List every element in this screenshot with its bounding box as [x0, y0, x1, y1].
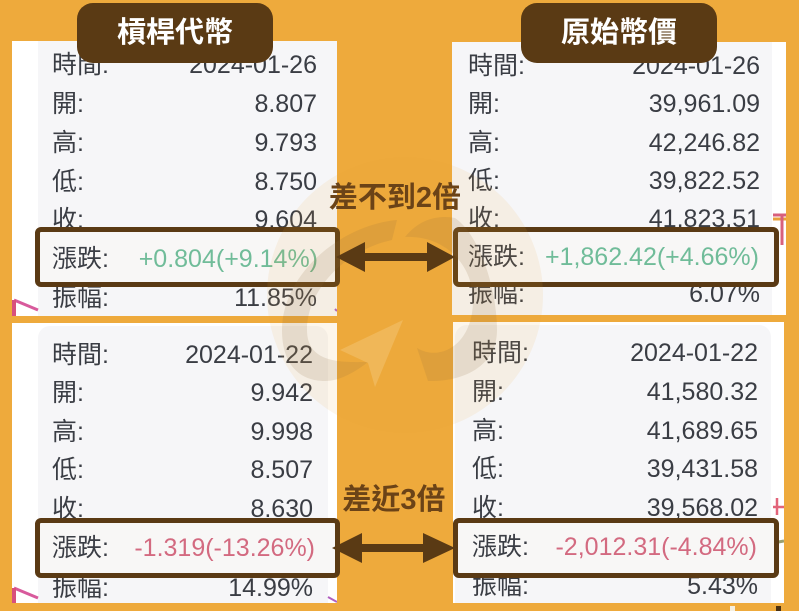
row: close: 收: [52, 206, 84, 234]
row: close: 收: [472, 494, 504, 522]
callout: change row, leveraged token top: +0.804(+9.14%) [139, 245, 318, 273]
row: high: 9.793 [254, 129, 317, 157]
row: low: 低: [472, 455, 504, 483]
row: amplitude [472, 572, 758, 600]
row: open: 8.807 [254, 90, 317, 118]
callout: change row, original price top: 漲跌: [468, 243, 525, 271]
row: close: 9.604 [254, 206, 317, 234]
callout: change row, leveraged token bottom: 漲跌: [52, 534, 109, 562]
row: low: 8.750 [254, 168, 317, 196]
row: high [472, 417, 758, 445]
row: time [52, 341, 313, 369]
note: less than 2x: 差不到2倍 [329, 182, 461, 214]
panel: leveraged token 2024-01-26 [12, 41, 337, 316]
row: time [52, 51, 317, 79]
callout: change row, original price top: +1,862.42(+4.66%) [545, 243, 759, 271]
row: close: 39,568.02 [647, 494, 758, 522]
panel: original price 2024-01-22 [453, 322, 784, 603]
row: time: 時間: [52, 51, 109, 79]
row: amplitude: 6.07% [689, 280, 760, 308]
row: low [52, 456, 313, 484]
row: amplitude: 11.85% [234, 284, 317, 312]
callout: change row, original price bottom: 漲跌: [472, 533, 529, 561]
row: high: 高: [468, 129, 500, 157]
callout: change row, original price bottom [453, 518, 779, 578]
row: close: 41,823.51 [649, 205, 760, 233]
row: close [52, 495, 313, 523]
row: high [52, 418, 313, 446]
note: nearly 3x: 差近3倍 [342, 484, 446, 516]
callout: change row, leveraged token top [35, 227, 340, 287]
row: low: 39,822.52 [649, 167, 760, 195]
row: high: 9.998 [250, 418, 313, 446]
row: high: 高: [472, 417, 504, 445]
row: time: 時間: [52, 341, 109, 369]
row: open: 開: [472, 378, 504, 406]
row: close [472, 494, 758, 522]
row: amplitude: 振幅: [472, 572, 529, 600]
row: low: 39,431.58 [647, 455, 758, 483]
row: open: 41,580.32 [647, 378, 758, 406]
row: open [468, 90, 760, 118]
row: high [468, 129, 760, 157]
heading: leveraged token: 槓桿代幣 [117, 17, 233, 49]
row: low: 8.507 [250, 456, 313, 484]
row: amplitude [52, 574, 313, 602]
heading: original price: 原始幣價 [561, 17, 677, 49]
callout: change row, original price bottom: -2,012.31(-4.84%) [555, 533, 757, 561]
row: low: 低: [52, 456, 84, 484]
row: time: 2024-01-22 [630, 339, 758, 367]
row: amplitude [52, 284, 317, 312]
row: high: 41,689.65 [647, 417, 758, 445]
row: low: 低: [52, 168, 84, 196]
callout: change row, leveraged token bottom: -1.319(-13.26%) [134, 534, 315, 562]
row: amplitude [468, 280, 760, 308]
row: low: 低: [468, 167, 500, 195]
row: close [52, 206, 317, 234]
callout: change row, leveraged token bottom [35, 518, 340, 578]
row: open [52, 379, 313, 407]
row: time [468, 52, 760, 80]
row: open: 開: [468, 90, 500, 118]
callout: change row, original price top [453, 227, 779, 287]
row: open [472, 378, 758, 406]
row: time: 時間: [468, 52, 525, 80]
row: close: 收: [468, 205, 500, 233]
row: high [52, 129, 317, 157]
row: high: 42,246.82 [649, 129, 760, 157]
heading: original price [521, 3, 717, 63]
row: time: 2024-01-26 [189, 51, 317, 79]
row: amplitude: 14.99% [228, 574, 313, 602]
row: low [468, 167, 760, 195]
row: amplitude: 振幅: [52, 574, 109, 602]
heading: leveraged token [77, 3, 273, 63]
row: open [52, 90, 317, 118]
row: close: 8.630 [250, 495, 313, 523]
row: amplitude: 5.43% [687, 572, 758, 600]
panel: original price 2024-01-26 [452, 42, 786, 315]
row: high: 高: [52, 129, 84, 157]
row: open: 39,961.09 [649, 90, 760, 118]
row: time [472, 339, 758, 367]
row: time: 時間: [472, 339, 529, 367]
row: open: 開: [52, 379, 84, 407]
row: low [52, 168, 317, 196]
row: time: 2024-01-26 [632, 52, 760, 80]
panel: leveraged token 2024-01-22 [12, 323, 337, 603]
row: close [468, 205, 760, 233]
row: low [472, 455, 758, 483]
row: amplitude: 振幅: [468, 280, 525, 308]
row: high: 高: [52, 418, 84, 446]
row: time: 2024-01-22 [185, 341, 313, 369]
row: open: 9.942 [250, 379, 313, 407]
callout: change row, leveraged token top: 漲跌: [52, 245, 109, 273]
row: close: 收: [52, 495, 84, 523]
row: open: 開: [52, 90, 84, 118]
row: amplitude: 振幅: [52, 284, 109, 312]
